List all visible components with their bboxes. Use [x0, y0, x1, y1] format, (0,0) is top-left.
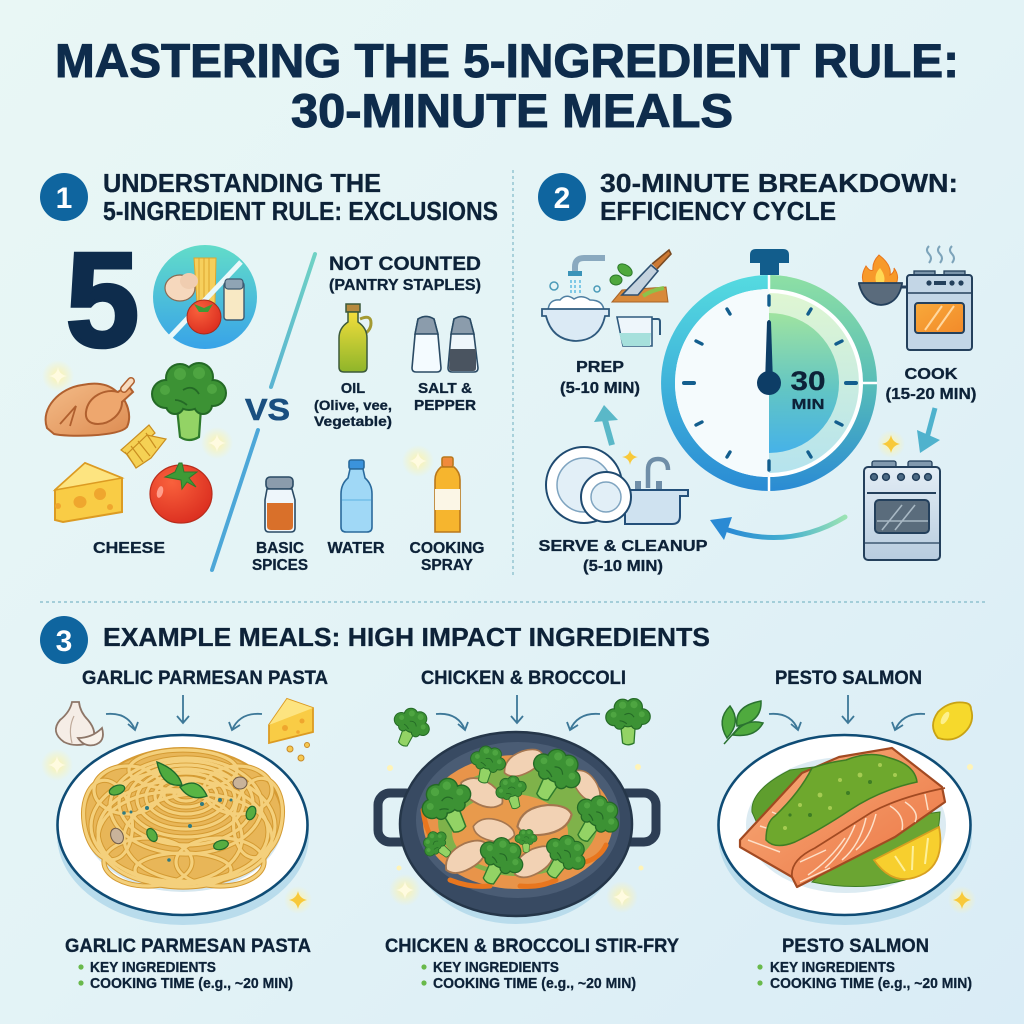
icon: tomato [150, 463, 212, 523]
icon: broccoli left [386, 703, 434, 753]
big number five: 5 [66, 226, 139, 375]
heading: not counted: NOT COUNTED [329, 254, 481, 275]
icon: lemon [933, 702, 972, 740]
meal: pesto salmon [718, 668, 976, 992]
icon: basil [722, 701, 763, 744]
icon: pasta bundle [121, 425, 166, 468]
icon: dishes and sink [546, 447, 688, 524]
label: chicken name and bullets: COOKING TIME (e.g., ~20 MIN) [433, 976, 636, 992]
heading: section 1: 5-INGREDIENT RULE: EXCLUSIONS [103, 196, 498, 226]
label: prep: (5-10 MIN) [560, 380, 640, 397]
heading: section 3: EXAMPLE MEALS: HIGH IMPACT INGREDIENTS [103, 622, 710, 652]
label: salt and pepper [414, 381, 477, 414]
icon: salt and pepper [412, 316, 478, 372]
label: salmon name and bullets: KEY INGREDIENTS [770, 960, 895, 976]
label: basic spices: BASIC [256, 540, 304, 557]
icon: broccoli [153, 364, 225, 440]
label: water: WATER [328, 540, 385, 557]
icon: parmesan [269, 699, 313, 761]
label: basic spices: SPICES [252, 557, 308, 574]
title: 30-MINUTE MEALS [291, 84, 733, 137]
plate: pesto salmon [718, 735, 972, 925]
icon: broccoli right [606, 699, 650, 745]
plate: pasta [57, 735, 309, 925]
label: salmon name and bullets [757, 936, 972, 992]
label: cooking spray [410, 540, 484, 574]
meal: chicken and broccoli [378, 668, 679, 992]
label: salmon top: PESTO SALMON [775, 668, 922, 689]
meal: garlic parmesan pasta [41, 668, 328, 992]
label: oil [314, 381, 392, 429]
label: oil: (Olive, vee, [314, 397, 392, 413]
sparkle on stove [877, 430, 905, 458]
heading: section 2: 2 [554, 182, 570, 215]
label: salmon name and bullets: PESTO SALMON [782, 936, 929, 957]
icon: garlic [56, 702, 103, 745]
label: basic spices [252, 540, 308, 574]
label: cook [886, 366, 976, 403]
label: chicken top: CHICKEN & BROCCOLI [421, 668, 626, 689]
icon: cooking spray [435, 457, 460, 532]
arrows: ingredients to pasta [106, 695, 262, 730]
arrow: serve to prep [594, 405, 618, 445]
label: chicken name and bullets: CHICKEN & BROCCOLI STIR-FRY [385, 936, 679, 957]
icon: water bottle [341, 460, 372, 532]
sparkles [41, 749, 312, 914]
stopwatch label: 30 [790, 366, 826, 396]
label: chicken name and bullets: KEY INGREDIENTS [433, 960, 559, 976]
heading: section 3 [40, 616, 710, 664]
title: MASTERING THE 5-INGREDIENT RULE: [55, 34, 959, 87]
heading: section 3: 3 [56, 625, 72, 658]
heading: section 1: 1 [56, 182, 72, 215]
panel: 30-minute breakdown [538, 168, 976, 575]
heading: not counted [329, 254, 481, 294]
label: pasta name and bullets [65, 936, 311, 992]
icon: stove [864, 461, 940, 560]
label: oil: OIL [341, 381, 365, 397]
label: serve and cleanup: SERVE & CLEANUP [538, 538, 708, 555]
wok with stir-fry [378, 732, 656, 924]
heading: section 1 [40, 168, 498, 226]
arrows: ingredients to salmon [769, 695, 925, 730]
heading: section 1: UNDERSTANDING THE [103, 168, 381, 198]
arrow: stove to serve [710, 517, 845, 540]
label: cooking spray: SPRAY [421, 557, 473, 574]
icon: chicken [46, 381, 133, 436]
panel: example meals [40, 616, 976, 992]
label: cook: (15-20 MIN) [886, 386, 976, 403]
sparkles [42, 360, 434, 477]
title [55, 34, 959, 137]
heading: section 2: 30-MINUTE BREAKDOWN: [600, 168, 958, 198]
label: cook: COOK [904, 366, 958, 383]
panel: understanding the rule [40, 168, 498, 574]
stopwatch label: MIN [792, 396, 824, 413]
label: oil: Vegetable) [314, 413, 392, 429]
arrows: ingredients to wok [436, 695, 600, 730]
label: prep [560, 359, 640, 397]
label: pasta top: GARLIC PARMESAN PASTA [82, 668, 328, 689]
icon: oil bottle [339, 304, 371, 372]
stopwatch label [790, 366, 826, 413]
label: salt and pepper: SALT & [418, 381, 473, 397]
icon: cheese [55, 463, 122, 522]
heading: not counted: (PANTRY STAPLES) [329, 277, 481, 294]
label: prep: PREP [576, 359, 624, 376]
stopwatch [661, 249, 877, 491]
label: cooking spray: COOKING [410, 540, 484, 557]
icon: prep tools [542, 250, 671, 346]
label: serve and cleanup [538, 538, 708, 575]
label: chicken name and bullets [385, 936, 679, 992]
icon: cook pan and oven [859, 246, 972, 350]
icon: spices jar [265, 477, 295, 532]
label: cheese: CHEESE [93, 540, 165, 557]
heading: section 2: EFFICIENCY CYCLE [600, 196, 836, 226]
heading: section 2 [538, 168, 958, 226]
divider: vs slash [212, 254, 315, 570]
label: salmon name and bullets: COOKING TIME (e.g., ~20 MIN) [770, 976, 972, 992]
sparkles [948, 764, 976, 914]
arrow: cook to stove [917, 408, 940, 453]
label: pasta name and bullets: COOKING TIME (e.g., ~20 MIN) [90, 976, 293, 992]
label: serve and cleanup: (5-10 MIN) [583, 558, 663, 575]
label: vs: VS [245, 392, 290, 427]
icon: no-count badge [153, 245, 257, 349]
label: pasta name and bullets: GARLIC PARMESAN PASTA [65, 936, 311, 957]
sparkles [387, 764, 644, 913]
label: salt and pepper: PEPPER [414, 398, 477, 414]
label: pasta name and bullets: KEY INGREDIENTS [90, 960, 216, 976]
